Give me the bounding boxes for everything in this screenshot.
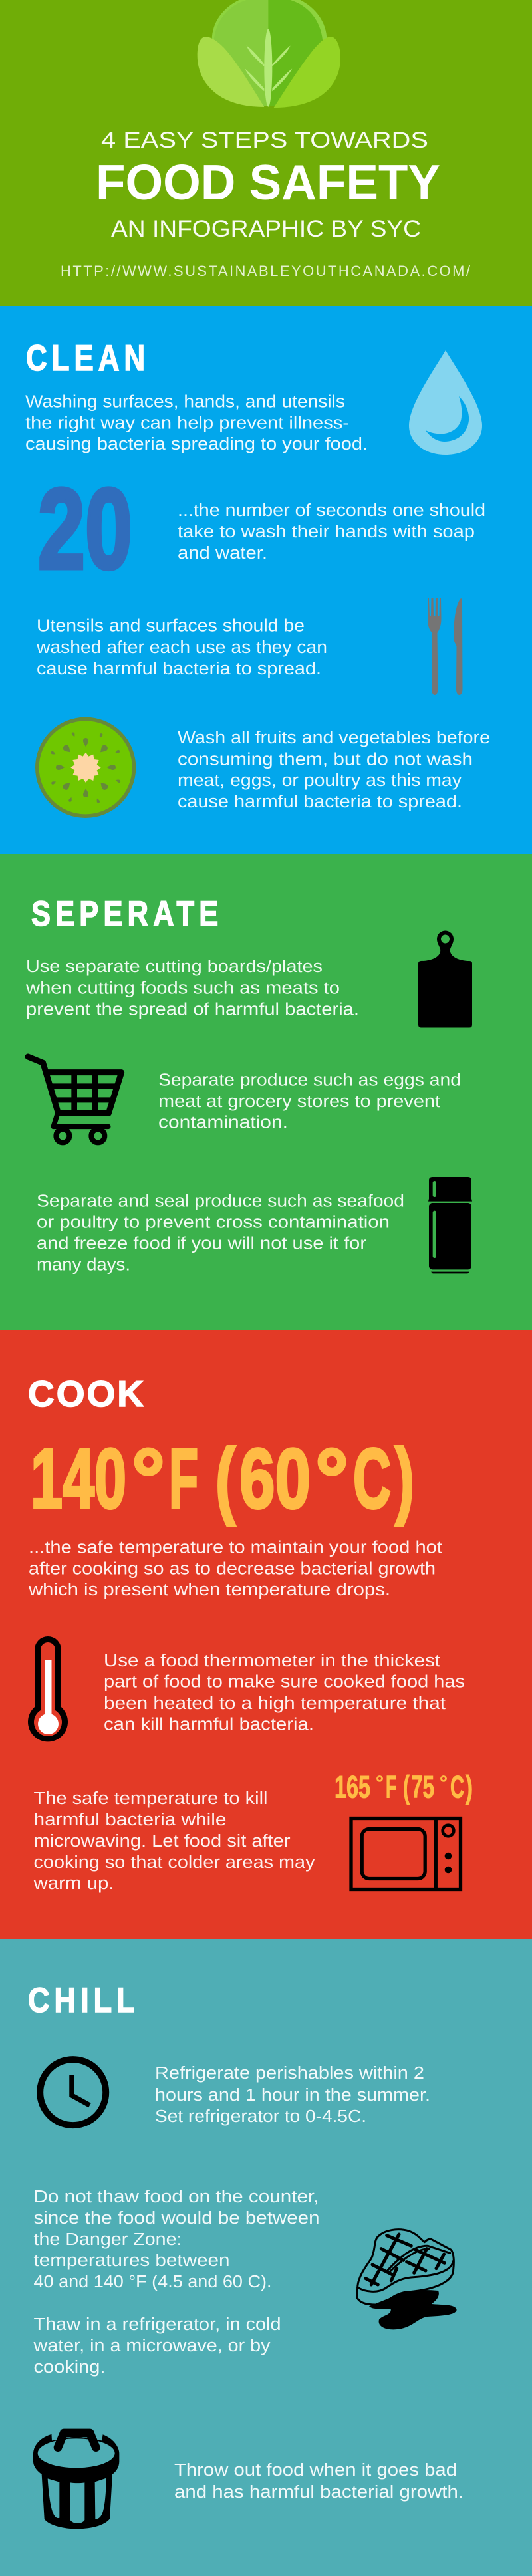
panel: cook [0,1330,532,1939]
text: separate and seal: and freeze food if you will not use it for [37,1234,367,1253]
icon: kiwi [35,717,136,818]
text: separate produce [158,1071,461,1132]
text: food thermometer [104,1652,465,1734]
text: separate produce: contamination. [158,1113,288,1132]
text: throw out: and has harmful bacterial growth. [174,2483,464,2502]
text: wash fruits and vegetables: meat, eggs, or poultry as this may [178,771,462,790]
callout: 165F: ° [440,1772,448,1794]
big number: 140F: ) [395,1432,414,1527]
text: do not thaw: since the food would be between [33,2209,320,2228]
big number: 20: 20 [38,465,132,593]
icon: cutting board [418,931,472,1028]
text: washing intro: Washing surfaces, hands, and utensils [25,392,345,411]
text: separate and seal: Separate and seal produce such as seafood [37,1192,404,1210]
text: separate and seal: or poultry to prevent cross contamination [37,1213,390,1231]
heading: chill: CHILL [28,1981,135,2020]
text: do not thaw: cooking. [33,2358,105,2377]
callout: 165F: ( [403,1769,410,1805]
text: number of seconds: ...the number of seconds one should [178,501,485,520]
icon: microwave [351,1818,460,1890]
heading: cook: COOK [28,1373,144,1414]
text: wash fruits and vegetables [178,729,490,811]
text: throw out: Throw out food when it goes bad [174,2461,457,2480]
icon: fork and knife [428,598,463,695]
big number: 140F: F [169,1432,198,1527]
text: refrigerate: Set refrigerator to 0-4.5C. [155,2107,366,2126]
big number: 140F: 140 [31,1432,126,1527]
text: separate and seal [37,1192,404,1274]
text: food thermometer: part of food to make sure cooked food has [104,1673,465,1692]
callout: 165F: ) [466,1769,473,1805]
text: wash fruits and vegetables: Wash all fruits and vegetables before [178,729,490,747]
callout: 165F [334,1769,473,1805]
text: cutting boards [25,958,359,1019]
text: wash fruits and vegetables: consuming them, but do not wash [178,750,473,769]
heading: clean: CLEAN [26,337,145,378]
panel: separate [0,854,532,1330]
icon: steak [357,2230,457,2329]
text: do not thaw: Thaw in a refrigerator, in cold [33,2315,281,2334]
panel: chill [0,1939,532,2576]
text: separate and seal: many days. [37,1255,130,1274]
text: utensils [36,617,327,678]
text: food thermometer: Use a food thermometer in the thickest [104,1652,440,1670]
icon: refrigerator [428,1177,472,1273]
subtitle: 4 easy steps: 4 EASY STEPS TOWARDS [101,128,428,153]
icon: trash can [33,2432,119,2529]
big number: 140F: 60 [239,1432,311,1527]
big number: 140F: ° [315,1432,348,1527]
icon: shopping cart [28,1057,122,1142]
text: cutting boards: prevent the spread of harmful bacteria. [26,1000,359,1019]
icon: water drop [409,350,482,455]
text: throw out [174,2461,464,2502]
icon: thermometer [28,1636,68,1741]
text: wash fruits and vegetables: cause harmful bacteria to spread. [178,793,462,811]
callout: 165F: 75 [411,1769,434,1805]
text: separate produce: Separate produce such as eggs and [158,1071,461,1089]
text: cutting boards: when cutting foods such as meats to [25,979,340,997]
text: number of seconds: and water. [178,544,267,563]
icon: lettuce [198,0,340,108]
text: do not thaw: Do not thaw food on the counter, [33,2188,319,2206]
big number: 140F: ( [215,1432,235,1527]
icon: clock [40,2059,106,2125]
text: refrigerate [155,2064,430,2126]
text: utensils: washed after each use as they can [36,638,327,657]
text: refrigerate: Refrigerate perishables within 2 [155,2064,424,2083]
heading: seperate: SEPERATE [31,894,218,934]
text: microwaving: warm up. [33,1874,114,1893]
text: safe temperature: ...the safe temperature to maintain your food hot [29,1539,442,1557]
text: safe temperature: which is present when temperature drops. [28,1581,390,1599]
text: microwaving: harmful bacteria while [33,1811,226,1829]
text: washing intro: causing bacteria spreading to your food. [25,435,368,453]
text: washing intro [25,392,368,453]
text: microwaving: The safe temperature to kill [33,1789,267,1808]
text: do not thaw [33,2188,320,2377]
text: do not thaw: water, in a microwave, or by [33,2337,271,2355]
callout: 165F: ° [376,1772,384,1794]
callout: 165F: F [386,1769,396,1805]
website url: HTTP://WWW.SUSTAINABLEYOUTHCANADA.COM/ [61,263,471,279]
panel: header [0,0,532,306]
text: food thermometer: can kill harmful bacteria. [104,1716,314,1734]
subtitle: an infographic by SYC: AN INFOGRAPHIC BY SYC [111,216,421,242]
text: utensils: cause harmful bacteria to spread. [37,660,321,678]
text: do not thaw: 40 and 140 °F (4.5 and 60 C). [33,2273,271,2291]
text: do not thaw: the Danger Zone: [33,2230,182,2249]
text: cutting boards: Use separate cutting boards/plates [26,958,323,976]
text: microwaving: microwaving. Let food sit after [33,1832,291,1851]
text: number of seconds: take to wash their hands with soap [178,523,475,541]
text: safe temperature: after cooking so as to decrease bacterial growth [29,1560,436,1579]
big number: 140F [31,1432,414,1527]
text: separate produce: meat at grocery stores to prevent [158,1093,440,1111]
text: microwaving [33,1789,315,1893]
text: refrigerate: hours and 1 hour in the summer. [155,2086,430,2105]
title: food safety: FOOD SAFETY [96,154,440,210]
text: number of seconds [178,501,485,563]
text: microwaving: cooking so that colder areas may [33,1853,315,1872]
callout: 165F: C [450,1769,464,1805]
text: utensils: Utensils and surfaces should be [37,617,305,636]
big number: 140F: ° [132,1432,165,1527]
text: food thermometer: been heated to a high temperature that [104,1694,446,1713]
text: washing intro: the right way can help prevent illness- [25,414,349,432]
panel: clean [0,306,532,854]
text: safe temperature [28,1539,442,1599]
text: do not thaw: temperatures between [33,2252,230,2270]
big number: 140F: C [353,1432,391,1527]
callout: 165F: 165 [334,1769,370,1805]
